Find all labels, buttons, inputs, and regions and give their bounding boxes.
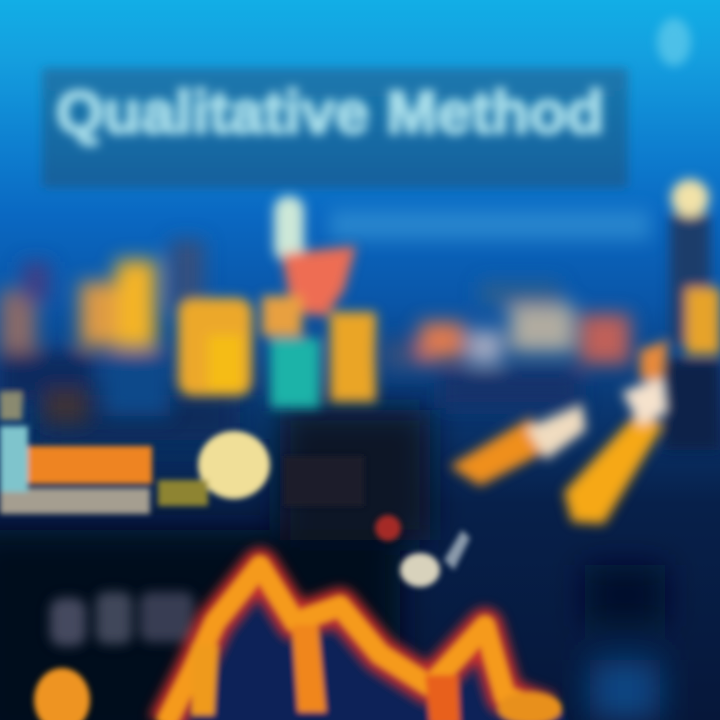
small lights lower centre [375,515,470,587]
icon: top right glow [657,18,691,66]
title: Qualitative Method [56,79,604,146]
skyline: central towers [178,196,376,408]
road light streaks [450,340,668,524]
city scene with shared soft focus [0,179,720,720]
tower right [664,179,720,450]
title panel [42,68,628,188]
grey text block lower left [50,592,194,646]
skyline: left buildings [0,240,204,424]
skyline: right side [384,282,630,408]
haze band under panel [330,210,650,240]
dark lower city mass [0,395,665,720]
area chart: orange peaks [34,560,570,720]
left mid-ground: orange sign and lights [0,392,364,514]
